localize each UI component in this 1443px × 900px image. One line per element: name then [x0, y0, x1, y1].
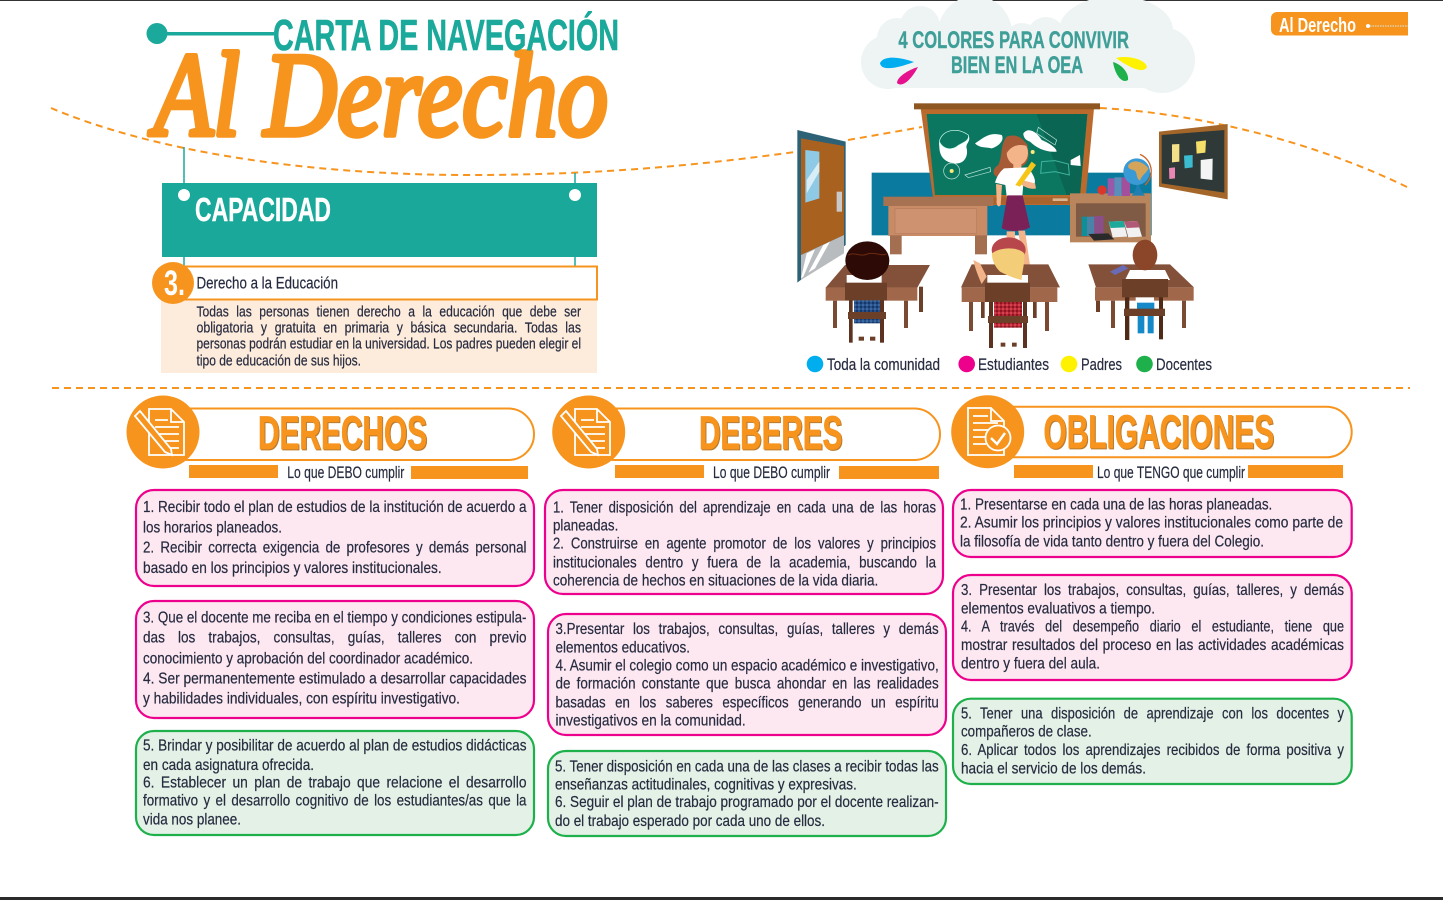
panel: capacidad: tipo de educación de sus hijos.	[196, 354, 361, 370]
box: obligaciones 5-6	[953, 699, 1352, 784]
title: Carta de Navegación Al Derecho: Derecho	[262, 28, 608, 161]
header: derechos: Lo que DEBO cumplir	[287, 463, 405, 482]
box: deberes 3-4: de formación constante que busca ahondar en las realidades	[556, 675, 939, 692]
box: deberes 1-2: coherencia de hechos en situaciones de la vida diaria.	[553, 573, 878, 590]
box: obligaciones 5-6: compañeros de clase.	[961, 724, 1092, 741]
student one	[826, 241, 930, 343]
panel: capacidad: obligatoria y gratuita en primaria y básica secundaria. Todas las	[196, 321, 581, 337]
box: derechos 3-4: das los trabajos, consultas, guías, talleres con previo	[143, 630, 527, 647]
header: derechos	[126, 396, 534, 482]
box: deberes 1-2: 1. Tener disposición del aprendizaje en cada una de las horas	[553, 499, 936, 516]
box: deberes 1-2	[545, 490, 943, 594]
teacher desk	[883, 197, 993, 254]
panel: capacidad: personas podrán estudiar en la universidad. Los padres pueden elegir el	[196, 337, 581, 353]
box: derechos 3-4: 3. Que el docente me reciba en el tiempo y condiciones estipula-	[143, 610, 526, 627]
box: obligaciones 5-6: hacia el servicio de los demás.	[961, 761, 1146, 778]
column: derechos	[126, 396, 534, 835]
panel: capacidad	[152, 147, 597, 373]
box: deberes 3-4: investigativos en la comunidad.	[556, 713, 746, 730]
header: deberes: Lo que DEBO cumplir	[713, 463, 830, 482]
cloud heading: 4 colores: BIEN EN LA OEA	[951, 52, 1083, 79]
box: obligaciones 3-4: elementos evaluativos a tiempo.	[961, 600, 1155, 617]
box: derechos 3-4	[136, 601, 534, 718]
header: obligaciones: OBLIGACIONES	[1044, 405, 1274, 458]
panel: capacidad: 3.	[164, 264, 185, 303]
box: deberes 1-2: 2. Construirse en agente promotor de los valores y principios	[553, 535, 936, 552]
teacher	[994, 135, 1036, 265]
box: derechos 1-2: basado en los principios y valores institucionales.	[143, 560, 442, 577]
legend: colores: Docentes	[1156, 355, 1212, 374]
box: derechos 5-6: en cada asignatura ofrecida.	[143, 757, 314, 774]
badge: Al Derecho	[1271, 12, 1408, 37]
box: derechos 5-6: 5. Brindar y posibilitar de acuerdo al plan de estudios didácticas	[143, 738, 526, 755]
box: deberes 5-6: 6. Seguir el plan de trabajo programado por el docente realizan-	[555, 794, 939, 811]
box: derechos 3-4: y habilidades individuales, con espíritu investigativo.	[143, 690, 460, 707]
box: derechos 1-2	[136, 490, 534, 586]
box: deberes 1-2: planeadas.	[553, 518, 618, 535]
box: deberes 5-6	[548, 751, 946, 836]
box: obligaciones 1-2	[953, 490, 1352, 557]
bulletin board	[1159, 124, 1228, 199]
illustration: classroom	[797, 103, 1228, 348]
box: derechos 1-2: 2. Recibir correcta exigencia de profesores y demás personal	[143, 540, 526, 556]
box: obligaciones 5-6: 5. Tener una disposición de aprendizaje con los docentes y	[961, 706, 1344, 722]
box: obligaciones 5-6: 6. Aplicar todos los aprendizajes recibidos de forma positiva y	[961, 742, 1344, 759]
box: obligaciones 1-2: la filosofía de vida tanto dentro y fuera del Colegio.	[960, 534, 1264, 551]
box: deberes 5-6: 5. Tener disposición en cada una de las clases a recibir todas las	[555, 759, 939, 776]
box: deberes 3-4	[548, 614, 946, 735]
box: obligaciones 3-4: 3. Presentar los trabajos, consultas, guías, talleres, y demás	[961, 582, 1344, 599]
box: deberes 5-6: enseñanzas actitudinales, cognitivas y expresivas.	[555, 776, 857, 793]
legend: colores	[807, 355, 1212, 374]
title: Carta de Navegación Al Derecho: Al	[148, 28, 240, 161]
box: obligaciones 3-4: 4. A través del desempeño diario el estudiante, tiene que	[961, 619, 1344, 636]
box: deberes 1-2: institucionales dentro y fuera de la academia, buscando la	[553, 554, 936, 571]
legend: colores: Padres	[1081, 355, 1122, 374]
panel: capacidad: CAPACIDAD	[195, 191, 331, 228]
box: derechos 5-6: formativo y el desarrollo cognitivo de los estudiantes/as que la	[143, 793, 527, 810]
box: deberes 3-4: 3.Presentar los trabajos, consultas, guías, talleres y demás	[556, 621, 939, 638]
box: obligaciones 1-2: 2. Asumir los principios y valores institucionales como parte de	[960, 515, 1343, 532]
panel: capacidad: Derecho a la Educación	[196, 274, 338, 292]
title: Carta de Navegación Al Derecho: CARTA DE NAVEGACIÓN	[273, 10, 619, 60]
box: deberes 3-4: basadas en los saberes específicos generando un espíritu	[556, 694, 939, 711]
box: deberes 3-4: 4. Asumir el colegio como un espacio académico e investigativo,	[556, 657, 939, 674]
panel: capacidad: Todas las personas tienen derecho a la educación que debe ser	[196, 304, 581, 320]
cloud heading: 4 colores: 4 COLORES PARA CONVIVIR	[898, 27, 1129, 54]
box: derechos 1-2: los horarios planeados.	[143, 520, 282, 537]
column: deberes	[545, 396, 946, 836]
cloud heading: 4 colores	[861, 0, 1195, 93]
header: obligaciones: Lo que TENGO que cumplir	[1097, 463, 1245, 482]
box: derechos 3-4: 4. Ser permanentemente estimulado a desarrollar capacidades	[143, 670, 526, 688]
box: derechos 5-6	[136, 731, 534, 835]
column: obligaciones	[951, 395, 1352, 784]
header: deberes: DEBERES	[699, 406, 842, 459]
box: deberes 3-4: elementos educativos.	[556, 639, 690, 656]
box: obligaciones 3-4: dentro y fuera del aula.	[961, 655, 1100, 672]
box: derechos 1-2: 1. Recibir todo el plan de estudios de la institución de acuerdo a	[143, 499, 527, 516]
student three	[1088, 240, 1194, 340]
header: derechos: DERECHOS	[258, 406, 427, 459]
title: Carta de Navegación Al Derecho	[146, 10, 619, 161]
box: derechos 3-4: conocimiento y aprobación del coordinador académico.	[143, 650, 473, 667]
legend: colores: Estudiantes	[978, 355, 1049, 374]
box: obligaciones 3-4: mostrar resultados del proceso en las actividades académicas	[961, 637, 1344, 654]
door	[797, 130, 846, 283]
student two	[961, 237, 1060, 348]
box: obligaciones 1-2: 1. Presentarse en cada una de las horas planeadas.	[960, 497, 1272, 514]
header: deberes	[552, 396, 940, 482]
box: derechos 5-6: 6. Establecer un plan de trabajo que relacione el desarrollo	[143, 775, 527, 792]
box: derechos 5-6: vida nos planee.	[143, 811, 241, 828]
shelf with books and globe	[1070, 154, 1151, 242]
box: deberes 5-6: do el trabajo esperado por cada uno de ellos.	[555, 813, 825, 830]
badge: Al Derecho: Al Derecho	[1279, 15, 1356, 37]
header: obligaciones	[951, 395, 1352, 482]
legend: colores: Toda la comunidad	[827, 355, 940, 374]
box: obligaciones 3-4	[953, 575, 1352, 680]
chalkboard	[914, 103, 1100, 205]
